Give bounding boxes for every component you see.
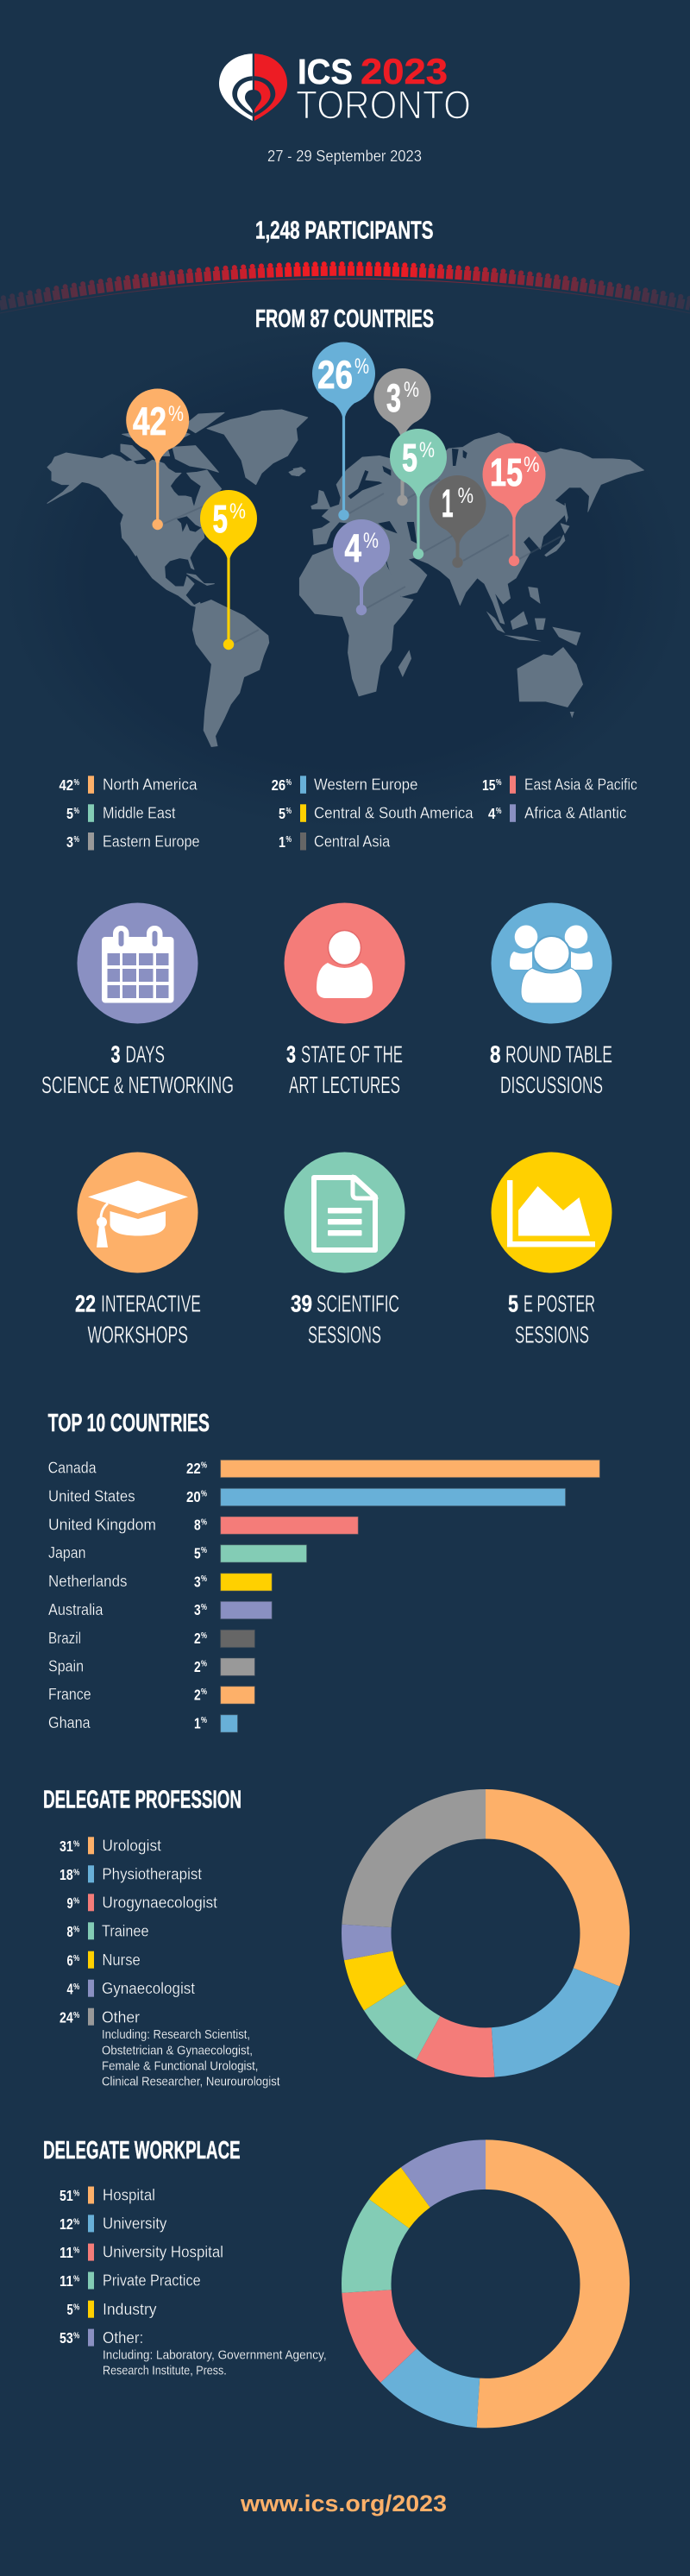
legend: Western Europe: 26 bbox=[272, 776, 285, 794]
label: 3 days: DAYS bbox=[126, 1040, 165, 1068]
pin: Western Europe 26%: 26 bbox=[317, 353, 353, 397]
bar: France: % bbox=[201, 1687, 207, 1697]
bar: United States bbox=[48, 1488, 566, 1506]
label: e poster sessions bbox=[508, 1291, 595, 1348]
row: Nurse: 6 bbox=[67, 1951, 73, 1969]
bar: United States: % bbox=[201, 1490, 207, 1499]
legend: delegate profession bbox=[60, 1837, 279, 2089]
legend: East Asia and Pacific bbox=[482, 776, 637, 794]
legend: Western Europe bbox=[272, 776, 417, 794]
bar: France bbox=[48, 1686, 254, 1704]
bar: Brazil: Brazil bbox=[48, 1630, 81, 1647]
bar: Ghana: % bbox=[201, 1716, 207, 1725]
row: University: % bbox=[73, 2218, 79, 2227]
bar: Japan: % bbox=[201, 1546, 207, 1555]
label: interactive workshops: WORKSHOPS bbox=[88, 1322, 188, 1348]
row: Hospital bbox=[60, 2186, 155, 2204]
legend: Central and South America: % bbox=[286, 807, 292, 816]
legend: Eastern Europe: % bbox=[74, 835, 79, 845]
pin: Eastern Europe 3% bbox=[374, 368, 431, 506]
row: Industry: % bbox=[73, 2303, 79, 2313]
world map bbox=[4, 328, 686, 828]
row: Other: % bbox=[73, 2332, 79, 2341]
legend: Middle East: 5 bbox=[66, 805, 73, 822]
legend: delegate workplace bbox=[60, 2186, 327, 2378]
row: University Hospital: University Hospital bbox=[103, 2244, 223, 2261]
icon: graduation cap bbox=[78, 1153, 198, 1273]
bar: Australia: 3 bbox=[194, 1601, 201, 1618]
bar: Netherlands bbox=[48, 1573, 272, 1591]
bar: Brazil: % bbox=[201, 1631, 207, 1641]
row: Urologist: 31 bbox=[60, 1838, 73, 1855]
pin: Central and South America 5%: 5 bbox=[212, 497, 228, 541]
legend: Central Asia: % bbox=[286, 835, 292, 845]
legend: Middle East bbox=[66, 804, 176, 822]
pin: North America 42%: % bbox=[168, 402, 184, 426]
icon: group of people bbox=[492, 902, 612, 1023]
row: Other: 53 bbox=[60, 2329, 73, 2347]
label: e poster sessions: E POSTER bbox=[524, 1291, 595, 1316]
legend: Western Europe: % bbox=[286, 778, 292, 788]
row: Trainee: Trainee bbox=[102, 1923, 148, 1940]
footer url: www.ics.org/2023 bbox=[240, 2491, 447, 2516]
bar: Brazil bbox=[48, 1630, 254, 1648]
label: 3 days: SCIENCE & NETWORKING bbox=[41, 1071, 234, 1098]
donut chart: delegate workplace bbox=[367, 2164, 605, 2403]
row: Hospital: Hospital bbox=[103, 2187, 155, 2204]
map glints bbox=[164, 480, 561, 643]
bar: Canada: Canada bbox=[48, 1460, 97, 1477]
bar: Japan: Japan bbox=[48, 1544, 86, 1561]
label: round table discussions: 8 bbox=[490, 1040, 500, 1068]
pin: East Asia and Pacific 15%: 15 bbox=[490, 450, 523, 494]
panel: interactive workshops bbox=[75, 1153, 201, 1348]
row: Hospital: % bbox=[73, 2190, 79, 2199]
pin: Middle East 5%: % bbox=[419, 438, 435, 462]
map: Americas north bbox=[47, 410, 308, 608]
row: Urologist: Urologist bbox=[102, 1838, 161, 1855]
label: interactive workshops: 22 bbox=[75, 1291, 96, 1316]
row: Urologist: % bbox=[73, 1840, 79, 1850]
bar: France: 2 bbox=[194, 1686, 201, 1703]
label: scientific sessions: SCIENTIFIC bbox=[317, 1291, 399, 1316]
row: Trainee: 8 bbox=[67, 1923, 73, 1940]
legend: Eastern Europe bbox=[66, 832, 200, 851]
label: scientific sessions: SESSIONS bbox=[308, 1322, 381, 1348]
row: Other: Female & Functional Urologist, bbox=[102, 2059, 259, 2073]
icon: area chart bbox=[492, 1153, 612, 1273]
row: Other: Other: bbox=[103, 2329, 143, 2347]
legend: Africa and Atlantic: % bbox=[496, 807, 502, 816]
row: Gynaecologist bbox=[67, 1980, 195, 1997]
bar: United States: United States bbox=[48, 1488, 135, 1505]
row: Nurse bbox=[67, 1951, 141, 1969]
row: Industry bbox=[67, 2301, 157, 2318]
pin: Middle East 5%: 5 bbox=[402, 436, 417, 480]
panel: 3 days bbox=[41, 902, 234, 1098]
pin: Western Europe 26% bbox=[312, 342, 375, 520]
heading: delegate profession: DELEGATE PROFESSION bbox=[43, 1787, 242, 1814]
pin: East Asia and Pacific 15%: % bbox=[524, 453, 540, 477]
pin: Eastern Europe 3%: % bbox=[404, 378, 419, 402]
legend: North America: North America bbox=[103, 776, 198, 794]
row: Private Practice bbox=[60, 2272, 201, 2290]
arc of people bbox=[0, 264, 690, 313]
bar: Ghana: Ghana bbox=[48, 1714, 91, 1731]
row: University bbox=[60, 2215, 166, 2233]
row: Other bbox=[60, 2008, 279, 2089]
icon: document bbox=[285, 1153, 405, 1273]
heading: top 10 countries: TOP 10 COUNTRIES bbox=[48, 1410, 210, 1437]
label: round table discussions: ROUND TABLE bbox=[505, 1040, 612, 1068]
label: state of the art lectures: STATE OF THE bbox=[301, 1040, 403, 1068]
bar: United States: 20 bbox=[186, 1488, 201, 1505]
label: state of the art lectures: 3 bbox=[286, 1040, 296, 1068]
legend: Central Asia: 1 bbox=[279, 833, 285, 851]
row: Other: Obstetrician & Gynaecologist, bbox=[102, 2044, 253, 2058]
row: University Hospital bbox=[60, 2244, 223, 2261]
panel: round table discussions bbox=[490, 902, 612, 1098]
bar: Netherlands: % bbox=[201, 1574, 207, 1584]
row: University: 12 bbox=[60, 2215, 73, 2233]
pin: Middle East 5% bbox=[390, 429, 447, 559]
pin: Central and South America 5% bbox=[200, 490, 257, 650]
legend: Eastern Europe: 3 bbox=[66, 833, 73, 851]
legend: Middle East: Middle East bbox=[103, 805, 176, 822]
legend: Western Europe: Western Europe bbox=[314, 776, 417, 794]
label: state of the art lectures bbox=[286, 1040, 403, 1098]
bar: Japan: 5 bbox=[194, 1544, 201, 1561]
legend: Central and South America: Central & South America bbox=[314, 805, 474, 822]
bar: Ghana: 1 bbox=[194, 1715, 201, 1732]
logo: ICS 2023 Toronto bbox=[219, 51, 471, 128]
bar: United Kingdom: % bbox=[201, 1517, 207, 1527]
label: e poster sessions: 5 bbox=[508, 1291, 518, 1316]
bar: Spain: % bbox=[201, 1660, 207, 1668]
row: Nurse: Nurse bbox=[102, 1951, 141, 1969]
row: Other bbox=[60, 2329, 327, 2378]
row: Trainee bbox=[67, 1922, 148, 1940]
map: Eurasia bbox=[293, 433, 644, 624]
pin: Africa and Atlantic 4%: % bbox=[363, 529, 379, 553]
bar: Canada bbox=[48, 1460, 599, 1478]
bar: Spain bbox=[48, 1658, 254, 1675]
map legend bbox=[59, 776, 637, 851]
row: Urologist bbox=[60, 1837, 161, 1855]
label: e poster sessions: SESSIONS bbox=[515, 1322, 589, 1348]
row: Other: Including: Laboratory, Government Agency, bbox=[103, 2348, 327, 2362]
heading: delegate workplace: DELEGATE WORKPLACE bbox=[43, 2137, 241, 2164]
legend: Africa and Atlantic: Africa & Atlantic bbox=[524, 805, 626, 822]
bar: Netherlands: Netherlands bbox=[48, 1573, 128, 1590]
row: Physiotherapist: Physiotherapist bbox=[102, 1866, 202, 1883]
logo text: ICS: ICS bbox=[298, 52, 353, 91]
icon: logo pin bbox=[219, 53, 287, 121]
label: scientific sessions: 39 bbox=[291, 1291, 312, 1316]
legend: East Asia and Pacific: 15 bbox=[482, 776, 496, 794]
icon: person bbox=[285, 902, 405, 1023]
row: Urogynaecologist: 9 bbox=[67, 1894, 73, 1912]
row: Trainee: % bbox=[73, 1926, 79, 1935]
bar: Spain: 2 bbox=[194, 1658, 201, 1675]
date: 27 - 29 September 2023 bbox=[267, 148, 422, 165]
label: round table discussions: DISCUSSIONS bbox=[500, 1071, 603, 1098]
bar: United Kingdom bbox=[48, 1516, 358, 1534]
pin: Eastern Europe 3%: 3 bbox=[386, 376, 401, 420]
bar: France: France bbox=[48, 1686, 91, 1703]
legend: East Asia and Pacific: % bbox=[496, 778, 502, 788]
row: University: University bbox=[103, 2215, 166, 2233]
legend: Eastern Europe: Eastern Europe bbox=[103, 833, 200, 851]
panel: state of the art lectures bbox=[285, 902, 405, 1098]
row: Urogynaecologist: Urogynaecologist bbox=[102, 1894, 217, 1912]
row: Industry: Industry bbox=[103, 2301, 157, 2318]
legend: Central Asia bbox=[279, 832, 391, 851]
bar chart: top 10 countries bbox=[48, 1460, 599, 1732]
bar: Brazil: 2 bbox=[194, 1630, 201, 1647]
label: 3 days bbox=[41, 1040, 234, 1098]
bar: Australia: Australia bbox=[48, 1601, 104, 1618]
legend: North America: % bbox=[74, 778, 79, 788]
legend: Africa and Atlantic: 4 bbox=[488, 805, 496, 822]
label: state of the art lectures: ART LECTURES bbox=[289, 1071, 400, 1098]
map: South America, Africa, Oceania bbox=[192, 545, 583, 747]
legend: Middle East: % bbox=[74, 807, 79, 816]
pin: Africa and Atlantic 4% bbox=[333, 519, 390, 615]
logo text: 2023: 2023 bbox=[361, 51, 448, 91]
heading: participants: 1,248 PARTICIPANTS bbox=[255, 217, 433, 245]
row: Other: Other bbox=[102, 2009, 140, 2026]
pin: Western Europe 26%: % bbox=[354, 355, 369, 379]
row: Other: 24 bbox=[60, 2008, 73, 2026]
legend: North America: 42 bbox=[59, 776, 73, 794]
label: scientific sessions bbox=[291, 1291, 399, 1348]
row: Gynaecologist: 4 bbox=[67, 1980, 73, 1997]
pin: Africa and Atlantic 4%: 4 bbox=[345, 526, 361, 570]
row: Physiotherapist: % bbox=[73, 1869, 79, 1878]
legend: Africa and Atlantic bbox=[488, 804, 626, 822]
row: Private Practice: % bbox=[73, 2275, 79, 2284]
pin: Central Asia 1%: 1 bbox=[442, 481, 454, 525]
row: Physiotherapist bbox=[60, 1865, 202, 1883]
row: Other: % bbox=[73, 2011, 79, 2020]
row: University Hospital: % bbox=[73, 2246, 79, 2256]
row: Nurse: % bbox=[73, 1954, 79, 1963]
bar: United Kingdom: United Kingdom bbox=[48, 1516, 156, 1533]
row: Gynaecologist: % bbox=[73, 1982, 79, 1992]
label: interactive workshops bbox=[75, 1291, 201, 1348]
row: Urogynaecologist: % bbox=[73, 1897, 79, 1907]
row: Industry: 5 bbox=[67, 2301, 73, 2318]
bar: Ghana bbox=[48, 1714, 238, 1732]
legend: Central Asia: Central Asia bbox=[314, 833, 391, 851]
panel: e poster sessions bbox=[492, 1153, 612, 1348]
pin: Central Asia 1% bbox=[430, 475, 486, 568]
label: round table discussions bbox=[490, 1040, 612, 1098]
donut chart: delegate profession bbox=[367, 1814, 605, 2052]
legend: East Asia and Pacific: East Asia & Pacific bbox=[524, 776, 637, 794]
label: 3 days: 3 bbox=[110, 1040, 121, 1068]
label: interactive workshops: INTERACTIVE bbox=[101, 1291, 201, 1316]
pin: Central Asia 1%: % bbox=[458, 484, 474, 508]
row: Hospital: 51 bbox=[60, 2187, 73, 2204]
heading: countries: FROM 87 COUNTRIES bbox=[255, 305, 434, 333]
pin: Central and South America 5%: % bbox=[229, 499, 246, 524]
bar: Canada: % bbox=[201, 1461, 207, 1471]
icon: calendar bbox=[78, 902, 198, 1023]
pin: North America 42% bbox=[126, 388, 189, 530]
bar: Australia bbox=[48, 1601, 272, 1619]
row: Other: Including: Research Scientist, bbox=[102, 2028, 250, 2042]
row: Private Practice: 11 bbox=[60, 2272, 73, 2290]
row: Other: Research Institute, Press. bbox=[103, 2364, 227, 2378]
panel: scientific sessions bbox=[285, 1153, 405, 1348]
row: Gynaecologist: Gynaecologist bbox=[102, 1980, 195, 1997]
pin: East Asia and Pacific 15% bbox=[483, 443, 545, 566]
bar: United Kingdom: 8 bbox=[194, 1517, 201, 1534]
pin: North America 42%: 42 bbox=[133, 399, 166, 443]
row: Physiotherapist: 18 bbox=[60, 1866, 73, 1883]
legend: Central and South America: 5 bbox=[279, 805, 285, 822]
bar: Netherlands: 3 bbox=[194, 1574, 201, 1591]
legend: North America bbox=[59, 776, 198, 794]
bar: Australia: % bbox=[201, 1603, 207, 1612]
bar: Canada: 22 bbox=[186, 1460, 201, 1477]
row: Other: Clinical Researcher, Neurourologist bbox=[102, 2075, 279, 2089]
bar: Spain: Spain bbox=[48, 1658, 84, 1675]
logo text: Toronto: TORONTO bbox=[296, 83, 471, 128]
row: Private Practice: Private Practice bbox=[103, 2272, 201, 2290]
bar: Japan bbox=[48, 1544, 307, 1562]
row: University Hospital: 11 bbox=[60, 2244, 73, 2261]
